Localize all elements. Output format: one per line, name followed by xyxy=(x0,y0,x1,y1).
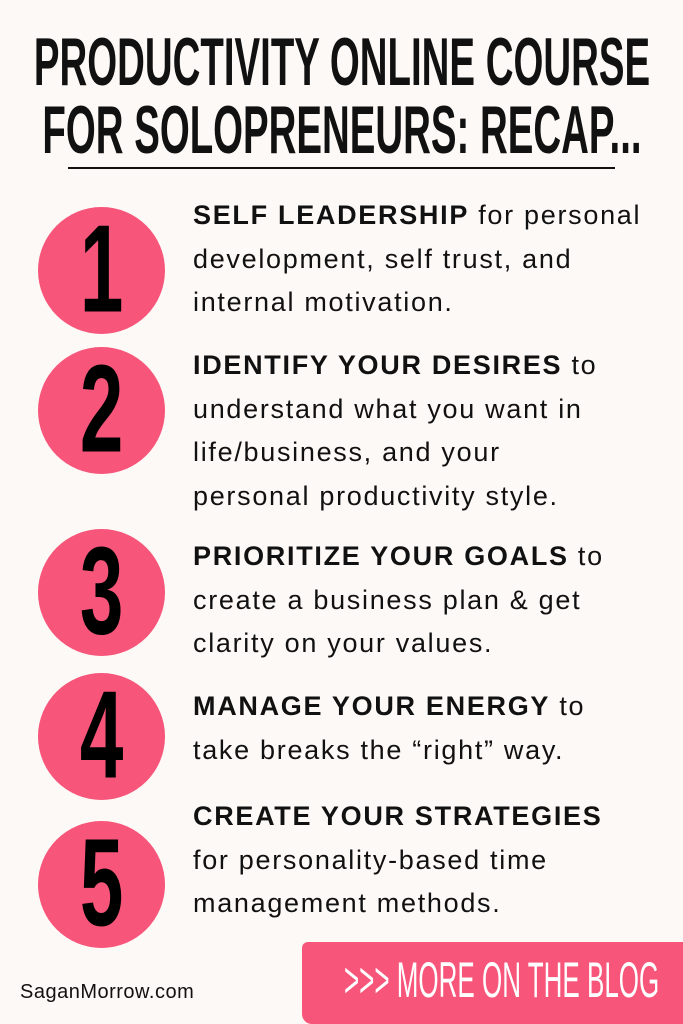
item 2 text xyxy=(193,350,597,510)
item 4 text xyxy=(193,691,585,764)
title: FOR SOLOPRENEURS: RECAP... xyxy=(42,92,641,168)
item 4 text: take breaks the “right” way. xyxy=(193,734,564,764)
circle 2 xyxy=(38,347,165,474)
item 4 text: MANAGE YOUR ENERGY to xyxy=(193,691,585,721)
website: SaganMorrow.com xyxy=(20,981,194,1003)
item 5 text: management methods. xyxy=(193,888,501,918)
item 3 text: create a business plan & get xyxy=(193,584,581,614)
circle 4: 4 xyxy=(80,667,123,805)
item 5 text: for personality-based time xyxy=(193,844,548,874)
item 1 text xyxy=(193,200,641,317)
circle 5: 5 xyxy=(80,815,123,953)
title: PRODUCTIVITY ONLINE COURSE xyxy=(33,24,650,100)
circle 3: 3 xyxy=(80,523,123,661)
banner: more on the blog: >>> MORE ON THE BLOG xyxy=(344,952,659,1008)
circle 3 xyxy=(38,529,165,656)
item 3 text: clarity on your values. xyxy=(193,628,493,658)
banner: more on the blog xyxy=(302,942,683,1024)
item 2 text: life/business, and your xyxy=(193,437,501,467)
circle 5 xyxy=(38,821,165,948)
item 1 text: development, self trust, and xyxy=(193,244,572,274)
item 5 text xyxy=(193,801,602,918)
item 3 text xyxy=(193,541,604,658)
item 2 text: personal productivity style. xyxy=(193,480,559,510)
circle 2: 2 xyxy=(80,341,123,479)
item 5 text: CREATE YOUR STRATEGIES xyxy=(193,801,602,831)
item 2 text: IDENTIFY YOUR DESIRES to xyxy=(193,350,597,380)
circle 4 xyxy=(38,673,165,800)
item 3 text: PRIORITIZE YOUR GOALS to xyxy=(193,541,604,571)
circle 1: 1 xyxy=(80,201,123,339)
item 1 text: internal motivation. xyxy=(193,287,454,317)
item 2 text: understand what you want in xyxy=(193,394,583,424)
title xyxy=(33,24,650,168)
circle 1 xyxy=(38,207,165,334)
item 1 text: SELF LEADERSHIP for personal xyxy=(193,200,641,230)
